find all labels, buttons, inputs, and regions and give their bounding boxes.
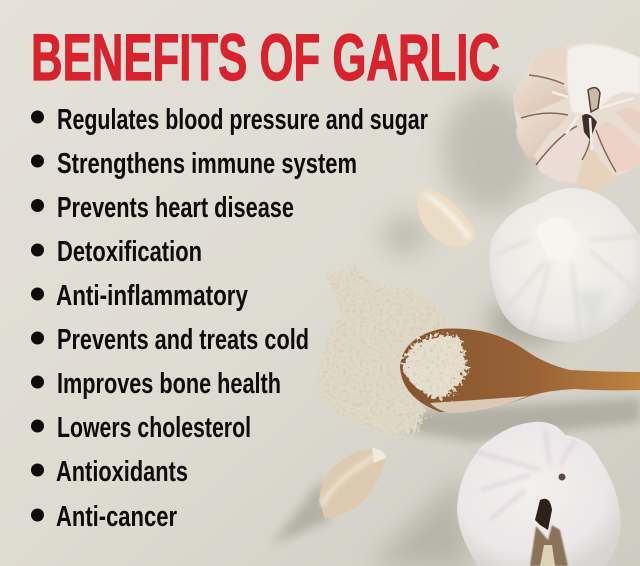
powder pile xyxy=(318,265,450,436)
item: detoxification: Detoxification xyxy=(57,236,202,268)
item: cold xyxy=(31,324,309,356)
item: cholesterol: Lowers cholesterol xyxy=(57,412,251,444)
wooden spoon xyxy=(400,328,640,413)
item: detoxification xyxy=(31,236,202,268)
item: anti-cancer: Anti-cancer xyxy=(56,501,177,533)
garlic bulb: bottom xyxy=(457,422,621,566)
item: anti-inflammatory: Anti-inflammatory xyxy=(56,280,248,312)
item: anti-cancer xyxy=(31,501,177,533)
spoon powder xyxy=(403,334,468,400)
item: bone health: Improves bone health xyxy=(57,368,281,400)
item: bone health xyxy=(31,368,281,400)
item: cholesterol xyxy=(31,412,251,444)
item: antioxidants xyxy=(31,456,188,488)
item: antioxidants: Antioxidants xyxy=(56,456,188,488)
garlic clove: upper xyxy=(417,187,476,248)
item: immune system: Strengthens immune system xyxy=(57,148,357,180)
item: blood pressure: Regulates blood pressure and sugar xyxy=(57,104,428,136)
garlic bulb: middle xyxy=(489,188,640,342)
garlic bulb: top xyxy=(513,42,640,193)
item: heart disease: Prevents heart disease xyxy=(57,192,294,224)
garlic clove: lower xyxy=(319,448,386,519)
shadows xyxy=(272,90,640,566)
item: heart disease xyxy=(31,192,294,224)
benefits list xyxy=(31,104,428,533)
item: cold: Prevents and treats cold xyxy=(57,324,309,356)
